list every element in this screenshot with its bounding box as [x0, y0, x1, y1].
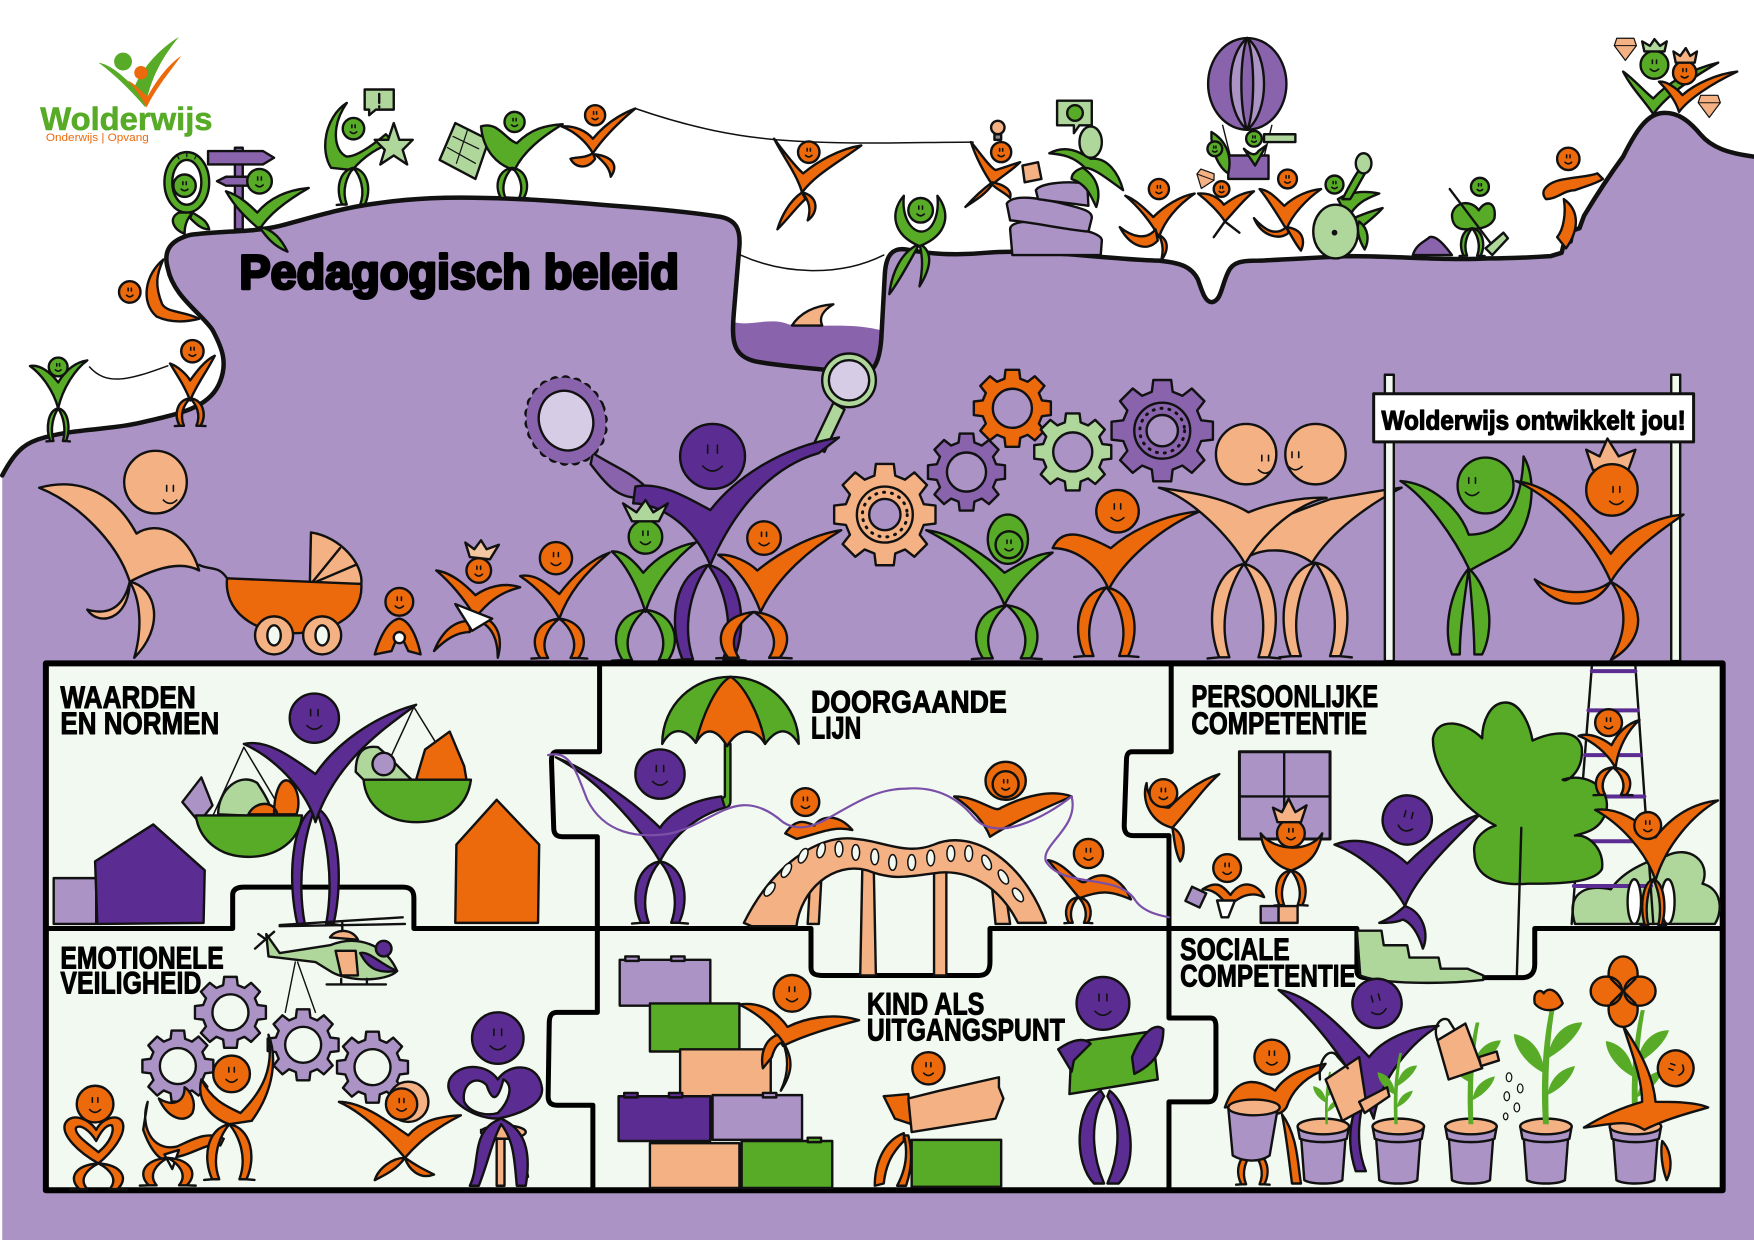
figure: orange with block — [875, 1052, 1003, 1187]
logo: Wolderwijs — [40, 101, 213, 137]
figure: purple gardener — [1279, 973, 1439, 1171]
figure: green with rope — [30, 358, 87, 441]
pots with plants — [1298, 990, 1669, 1184]
sign: Wolderwijs ontwikkelt jou: Wolderwijs ontwikkelt jou! — [1381, 406, 1686, 436]
heading — [60, 941, 224, 1000]
ribbon — [548, 754, 1169, 917]
icon: light bulb — [991, 121, 1005, 140]
figure: green wheelchair — [1313, 153, 1383, 258]
heading: VEILIGHEID — [60, 965, 201, 1000]
figure: purple with shirt — [1058, 977, 1163, 1184]
heading — [811, 685, 1007, 745]
pile of stones — [1413, 237, 1452, 255]
heading: UITGANGSPUNT — [867, 1012, 1065, 1047]
figure: orange with crown dancing — [1516, 439, 1684, 660]
icon: map — [440, 123, 489, 179]
figure: toddler with crown — [434, 540, 520, 658]
figure: orange at ribbon end — [1048, 839, 1131, 923]
stairs — [1357, 931, 1483, 983]
panel: doorgaande lijn — [548, 677, 1169, 975]
figure: green arms over head — [889, 196, 945, 294]
heading — [1191, 679, 1378, 741]
figure: orange hanging on cliff — [119, 260, 199, 321]
helicopter — [255, 917, 405, 1012]
figure: orange in notch — [1145, 774, 1219, 861]
gear: orange — [974, 370, 1051, 447]
icon: mirror — [517, 369, 643, 498]
figure: green with broom — [1450, 178, 1508, 256]
figure: orange climbing — [1543, 148, 1603, 248]
figure: green at summit — [1623, 39, 1718, 114]
tree — [1433, 702, 1607, 975]
figure: green with hijab — [926, 515, 1053, 659]
icon: watering can right — [1436, 1019, 1499, 1079]
figure: orange crown at window — [1261, 799, 1322, 906]
houses — [54, 800, 539, 924]
gear: purple large — [1112, 380, 1213, 481]
heading: COMPETENTIE — [1180, 959, 1356, 994]
icon: small can — [1022, 162, 1041, 182]
icon: blocks — [1261, 906, 1298, 923]
icon: speech bubble smile — [1057, 101, 1092, 133]
icon: stroller — [227, 532, 361, 654]
figure: orange — [716, 521, 841, 658]
gear: purple small — [928, 434, 1005, 511]
figure: green sitting by signpost — [226, 169, 309, 252]
bridge — [744, 838, 1046, 975]
figure: green waving — [1401, 456, 1532, 654]
figure: orange on bridge left — [785, 788, 852, 839]
icon: magnifier — [813, 353, 876, 452]
figure: orange on rope — [774, 139, 861, 229]
figure: orange at summit — [1659, 48, 1737, 112]
figure: orange climber — [170, 340, 215, 426]
gears — [142, 977, 408, 1103]
figure: baby with block — [1185, 854, 1264, 917]
panel: persoonlijke competentie — [1145, 667, 1720, 983]
icon: star — [375, 123, 413, 164]
figure: purple on stool — [448, 1012, 542, 1186]
heading: EMOTIONELE — [60, 941, 224, 976]
icon: stacked stones — [1007, 182, 1102, 255]
figure: orange with watering can — [965, 142, 1020, 207]
icon: umbrella — [662, 677, 799, 808]
heading: WAARDEN — [60, 680, 196, 715]
figure: large purple with mirror and magnifier — [517, 353, 876, 661]
heading: KIND ALS — [867, 987, 984, 1022]
icon: hot air balloon — [1208, 38, 1286, 179]
gear: peach — [834, 464, 936, 565]
figure: orange running — [1254, 170, 1321, 251]
figure: orange with hijab — [954, 762, 1072, 837]
figure: small orange heart — [64, 1086, 126, 1189]
figure: green with star — [325, 103, 394, 205]
logo: Onderwijs | Opvang — [46, 132, 149, 144]
figure: baby sitting — [375, 588, 421, 654]
scale right bowl — [356, 707, 471, 822]
icon: diamonds — [1193, 38, 1720, 192]
heading: PERSOONLIJKE — [1191, 679, 1378, 714]
figure: purple balance — [244, 694, 416, 926]
figure: orange standing — [1120, 179, 1195, 261]
lego blocks — [619, 956, 832, 1188]
figure: orange adult — [1053, 490, 1200, 657]
panel: waarden en normen — [54, 680, 539, 926]
figure: orange on ladder — [1578, 709, 1647, 795]
window — [1239, 752, 1330, 839]
hilltop figures: right group — [965, 38, 1737, 261]
heading: SOCIALE — [1180, 932, 1290, 967]
heading: EN NORMEN — [60, 706, 219, 741]
water drops — [1503, 1073, 1523, 1120]
figure: orange baby — [1198, 181, 1254, 237]
figure: child with glasses — [520, 542, 610, 659]
gear: light green — [1034, 413, 1111, 490]
heading: LIJN — [811, 710, 861, 745]
figure: orange holding gear — [200, 1035, 273, 1180]
sign: Wolderwijs ontwikkelt jou — [1374, 375, 1694, 661]
icon: watering can left — [1320, 1053, 1389, 1121]
figure: orange with eyes — [1595, 800, 1718, 926]
heading: COMPETENTIE — [1191, 706, 1367, 741]
figure: purple climbing — [1335, 790, 1480, 949]
figure: orange flower — [1584, 956, 1708, 1180]
icon: speech bubble exclamation — [365, 89, 394, 115]
figure: green with map — [481, 112, 563, 198]
figure: orange on blocks — [739, 975, 859, 1091]
panel: emotionele veiligheid — [60, 917, 542, 1189]
heading — [60, 680, 219, 741]
figure: green with bubble — [1049, 126, 1123, 207]
figure: green in balloon with telescope — [1207, 131, 1295, 173]
figure: mother with stroller — [39, 451, 361, 658]
figure: orange with peach face — [339, 1082, 461, 1180]
bush — [1573, 852, 1720, 924]
figure: purple with umbrella — [556, 749, 725, 924]
figure: peach couple — [1159, 424, 1402, 658]
gears — [834, 370, 1213, 565]
panel: kind als uitgangspunt — [619, 956, 1163, 1188]
figure: orange child with pot — [1225, 1040, 1326, 1185]
main title: Pedagogisch beleid — [239, 246, 679, 300]
figure: surprised green — [164, 152, 209, 234]
figure: green with crown — [612, 500, 696, 661]
scale left bowl — [182, 747, 302, 857]
heading: DOORGAANDE — [811, 685, 1007, 720]
water pool with fin — [734, 304, 884, 380]
logo — [40, 37, 213, 144]
heading — [867, 987, 1065, 1047]
figure: orange baby with gear — [140, 1087, 224, 1186]
ropes — [89, 109, 973, 379]
figure: orange hanging — [562, 105, 635, 177]
heading — [1180, 932, 1356, 994]
panel frame — [46, 663, 1723, 1190]
panel: sociale competentie — [1180, 932, 1708, 1185]
ladder — [1572, 667, 1653, 924]
hilltop figures: left group — [30, 89, 945, 441]
icon: signpost — [208, 148, 274, 229]
